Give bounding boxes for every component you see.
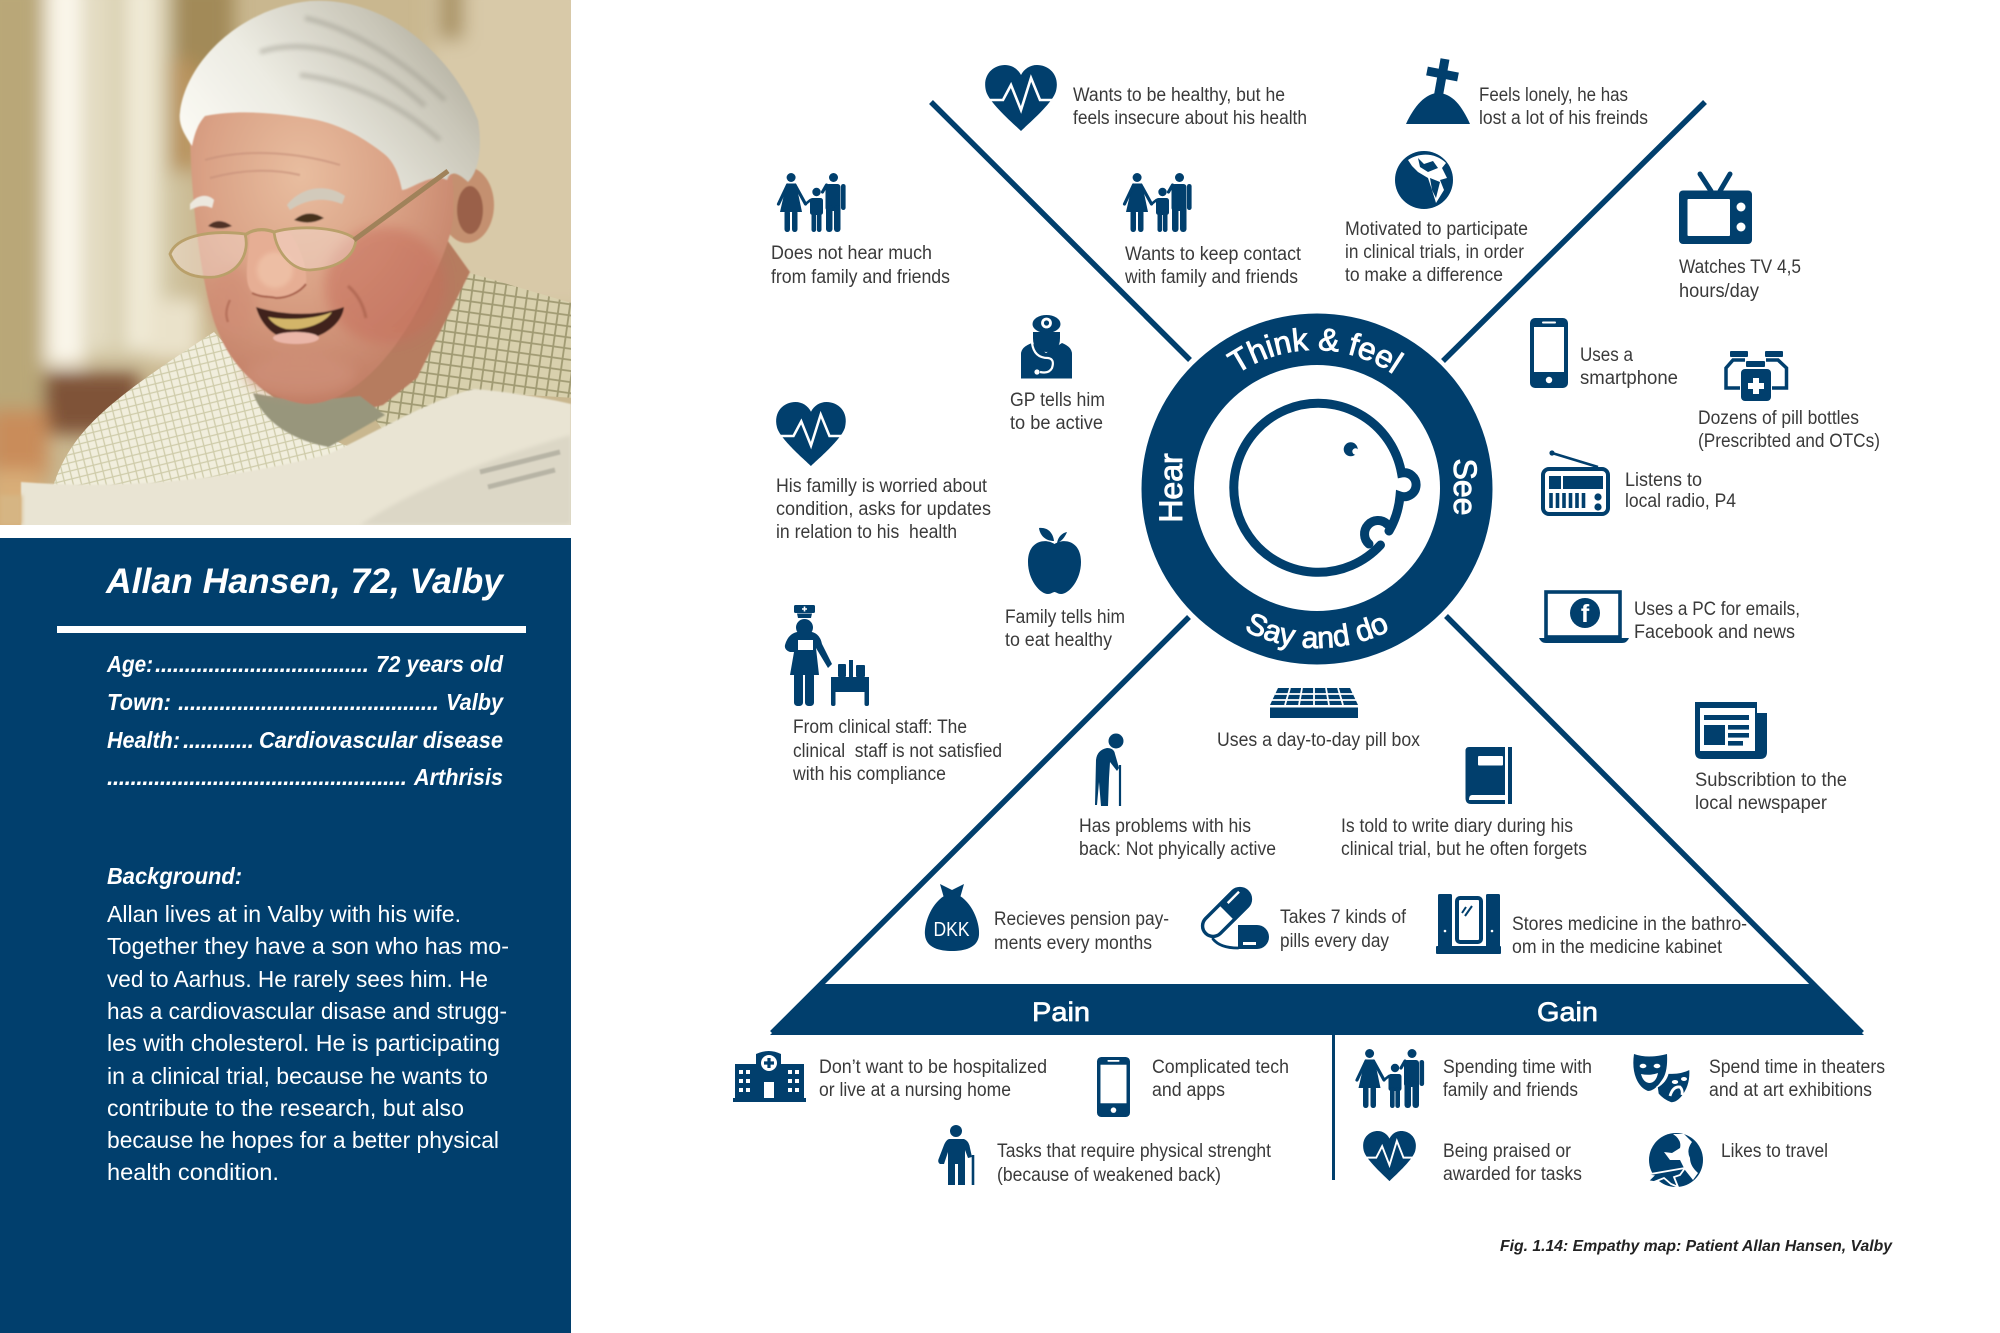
glasses [170,228,356,277]
label: hear: Hear [1153,453,1189,523]
item: feels lonely [1406,59,1648,129]
item: gain travel: Likes to travel [1721,1141,1828,1162]
item: feels lonely: Feels lonely, he has [1479,85,1628,106]
item: family worried: condition, asks for updates [776,499,991,520]
profile facts: Town: [107,689,171,715]
item: pain hospitalized: Don’t want to be hospitalized [819,1057,1047,1078]
item: family worried: in relation to his health [776,522,957,543]
hair [180,1,480,190]
item: takes pills [1197,882,1407,952]
item: motivated for clinical trials [1345,151,1528,286]
item: gp tells him to be active: to be active [1010,413,1103,434]
profile facts: ................................................... [107,764,407,790]
background text: contribute to the research, but also [107,1095,464,1121]
profile facts: Arthrisis [413,764,503,790]
icon: nurse with cart [785,605,869,706]
icon: apple [1028,528,1081,594]
background text: Background: [107,863,242,889]
background text: in a clinical trial, because he wants to [107,1063,488,1089]
item: pain hospitalized: or live at a nursing home [819,1080,1011,1101]
icon: newspaper [1695,702,1767,759]
item: does not hear much [771,173,950,288]
item: family worried [776,402,991,543]
icon: grave [1406,59,1470,124]
neck and face [190,85,494,447]
item: pill box [1217,688,1420,751]
icon: family [1124,173,1192,232]
profile facts: ............ [183,727,254,753]
item: clinical staff: From clinical staff: The [793,717,967,738]
icon: smartphone [1097,1057,1130,1117]
profile facts [106,651,504,790]
item: diary [1341,747,1587,860]
icon: television [1679,174,1752,244]
background text: les with cholesterol. He is participating [107,1030,500,1056]
icon: smartphone [1530,318,1568,388]
icon: head profile [1234,403,1416,572]
item: uses a pc: Facebook and news [1634,622,1795,643]
icon: money bag: DKK [934,919,970,941]
item: wants to keep contact [1124,173,1302,288]
profile facts: Valby [446,689,504,715]
item: family tells him to eat healthy: Family tells him [1005,607,1125,628]
item: pain physical tasks [938,1125,1272,1186]
icon: hospital [733,1051,806,1102]
item: pill bottles [1698,351,1880,452]
profile facts: ............................................ [178,689,439,715]
label: see: See [1447,459,1483,515]
icon: heart pulse [776,402,846,466]
icon: pills [1197,882,1269,949]
item: pain physical tasks: (because of weakened back) [997,1165,1221,1186]
item: gain theaters: and at art exhibitions [1709,1080,1872,1101]
background text: has a cardiovascular disase and strugg- [107,998,507,1024]
item: takes pills: pills every day [1280,931,1389,952]
item: wants to be healthy: feels insecure about his health [1073,108,1307,129]
profile facts: Cardiovascular disease [259,727,503,753]
item: does not hear much: Does not hear much [771,243,932,264]
caption: Fig. 1.14: Empathy map: Patient Allan Hansen, Valby [1500,1238,1893,1255]
item: pill box: Uses a day-to-day pill box [1217,730,1420,751]
item: uses a pc: Uses a PC for emails, [1634,599,1800,620]
background text: Allan lives at in Valby with his wife. [107,901,461,927]
item: medicine cabinet [1436,894,1747,958]
icon: family [778,173,846,232]
item: wants to be healthy [985,65,1307,131]
background text [107,863,509,1185]
item: gp tells him to be active: GP tells him [1010,390,1105,411]
icon: theater masks [1633,1054,1690,1103]
background text: ved to Aarhus. He rarely sees him. He [107,966,488,992]
item: motivated for clinical trials: in clinical trials, in order [1345,242,1525,263]
profile facts: 72 years old [376,651,504,677]
item: gain theaters [1633,1054,1885,1103]
item: newspaper subscription: local newspaper [1695,793,1828,814]
item: newspaper subscription [1695,702,1847,814]
item: motivated for clinical trials: to make a difference [1345,265,1503,286]
item: uses a smartphone [1530,318,1678,389]
heading: pain: Pain [1032,997,1090,1027]
item: pension [925,884,1169,954]
item: gain praise: Being praised or [1443,1141,1572,1162]
item: watches tv: hours/day [1679,281,1759,302]
item: clinical staff [785,605,1002,785]
item: pain hospitalized [733,1051,1047,1102]
label: say and do: Say and do [1246,614,1388,650]
item: listens to radio: local radio, P4 [1625,491,1736,512]
item: pain complicated tech: and apps [1152,1080,1225,1101]
item: clinical staff: with his compliance [792,764,946,785]
item: pain complicated tech: Complicated tech [1152,1057,1289,1078]
item: diary: Is told to write diary during his [1341,816,1573,837]
item: takes pills: Takes 7 kinds of [1280,907,1407,928]
panel: profile and background [0,538,571,1333]
icon: doctor [1021,315,1072,378]
item: gain family time [1357,1049,1592,1108]
icon: family [1357,1049,1424,1108]
item: clinical staff: clinical staff is not satisfied [793,741,1002,762]
item: watches tv: Watches TV 4,5 [1679,257,1801,278]
center ring with head [1142,314,1492,664]
icon: bathroom cabinet [1436,894,1501,954]
item: family worried: His familly is worried about [776,476,988,497]
item: back problems [1079,734,1276,860]
item: family tells him to eat healthy: to eat healthy [1005,630,1112,651]
item: pension: Recieves pension pay- [994,909,1169,930]
icon: heart pulse [1363,1131,1416,1181]
item: pain complicated tech [1097,1057,1289,1117]
icon: book [1466,747,1512,804]
item: wants to keep contact: with family and friends [1124,267,1298,288]
item: diary: clinical trial, but he often forgets [1341,839,1587,860]
label: think and feel: Think & feel [1226,328,1405,374]
icon: bent old man [1095,734,1124,806]
newspaper [21,389,571,530]
item: medicine cabinet: om in the medicine kabinet [1512,937,1723,958]
item: gain family time: family and friends [1443,1080,1578,1101]
icon: globe [1395,151,1453,209]
empathy map divider lines [772,102,1862,1033]
item: back problems: back: Not phyically active [1079,839,1276,860]
item: back problems: Has problems with his [1079,816,1251,837]
item: medicine cabinet: Stores medicine in the bathro- [1512,914,1747,935]
icon: radio [1543,450,1608,514]
item: motivated for clinical trials: Motivated to participate [1345,219,1528,240]
profile facts: .................................... [155,651,369,677]
item: wants to keep contact: Wants to keep contact [1125,244,1302,265]
item: pain physical tasks: Tasks that require physical strenght [997,1141,1272,1162]
item: newspaper subscription: Subscribtion to the [1695,770,1847,791]
icon: old man with cane [938,1125,973,1185]
background text: because he hopes for a better physical [107,1127,499,1153]
item: gain praise [1363,1131,1582,1185]
icon: pill box [1270,688,1358,718]
item: listens to radio [1543,450,1736,514]
icon: globe with airplane [1645,1133,1703,1187]
icon: heart pulse [985,65,1057,131]
item: gp tells him to be active [1010,315,1105,434]
background text: health condition. [107,1159,279,1185]
profile facts: Health: [107,727,180,753]
icon: money bag [925,884,979,951]
item: wants to be healthy: Wants to be healthy, but he [1073,85,1285,106]
heading: gain: Gain [1537,997,1598,1027]
item: gain praise: awarded for tasks [1443,1164,1582,1185]
item: pill bottles: Dozens of pill bottles [1698,408,1859,429]
heading: name: Allan Hansen, 72, Valby [105,562,505,601]
photo: portrait of smiling elderly man [0,0,590,540]
item: uses a pc [1539,592,1800,643]
item: family tells him to eat healthy [1005,528,1125,651]
shirt [54,332,347,486]
item: gain family time: Spending time with [1443,1057,1592,1078]
icon: pill bottles [1726,351,1786,401]
item: pension: ments every months [994,933,1152,954]
icon: laptop with facebook [1539,592,1629,643]
item: pill bottles: (Prescribted and OTCs) [1698,431,1880,452]
item: uses a smartphone: Uses a [1580,345,1633,366]
background text: Together they have a son who has mo- [107,933,509,959]
base bar: pain and gain [770,984,1864,1180]
item: does not hear much: from family and friends [771,267,950,288]
item: feels lonely: lost a lot of his freinds [1479,108,1648,129]
item: watches tv [1679,174,1801,302]
item: listens to radio: Listens to [1625,470,1702,491]
item: uses a smartphone: smartphone [1580,368,1678,389]
icon: laptop with facebook: f [1581,600,1590,628]
item: gain theaters: Spend time in theaters [1709,1057,1885,1078]
profile facts: Age: [106,651,153,677]
item: gain travel [1645,1133,1828,1187]
